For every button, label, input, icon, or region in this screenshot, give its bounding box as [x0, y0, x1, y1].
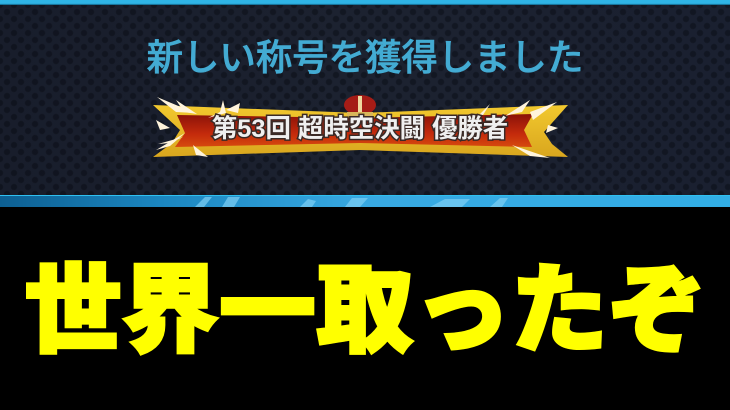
banner gold frame [153, 105, 568, 157]
panel: game screenshot [0, 0, 730, 207]
title: big yellow caption: 世界一取ったぞ [24, 256, 706, 365]
decoration: light shapes in lower band [195, 197, 508, 207]
sparks: lightning left [156, 97, 240, 157]
banner red field [175, 114, 533, 147]
heading: new title earned: 新しい称号を獲得しました [147, 37, 583, 78]
sparks: lightning right [478, 100, 558, 158]
banner: title plate [153, 95, 568, 158]
icon: crown [344, 95, 376, 116]
banner text: 第53回 超時空決闘 優勝者 [212, 115, 508, 143]
